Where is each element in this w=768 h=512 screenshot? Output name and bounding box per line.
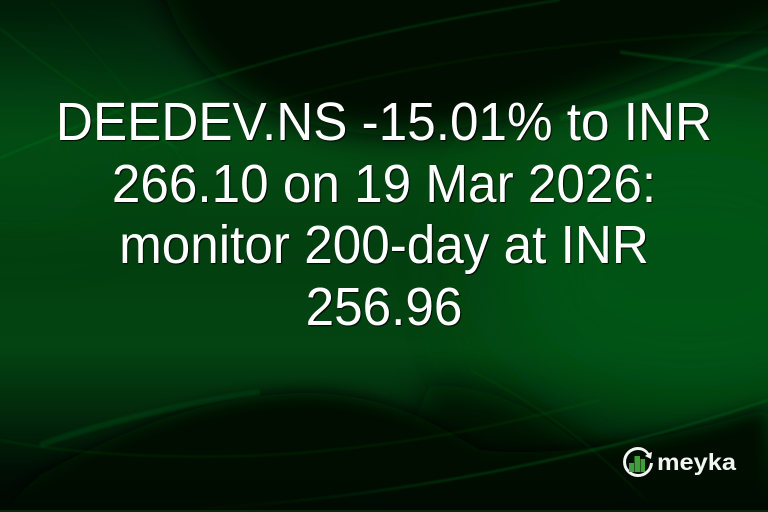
top dark xyxy=(150,0,768,135)
title: DEEDEV.NS -15.01% to INR xyxy=(56,93,712,152)
lower dark waves xyxy=(380,385,640,505)
title: 256.96 xyxy=(306,278,462,336)
logo: meyka xyxy=(623,447,736,477)
title: monitor 200-day at INR xyxy=(119,216,649,275)
wordmark: meyka xyxy=(657,449,736,475)
icon: chart in ring xyxy=(625,447,652,475)
title xyxy=(56,93,712,336)
title: 266.10 on 19 Mar 2026: xyxy=(112,154,656,214)
